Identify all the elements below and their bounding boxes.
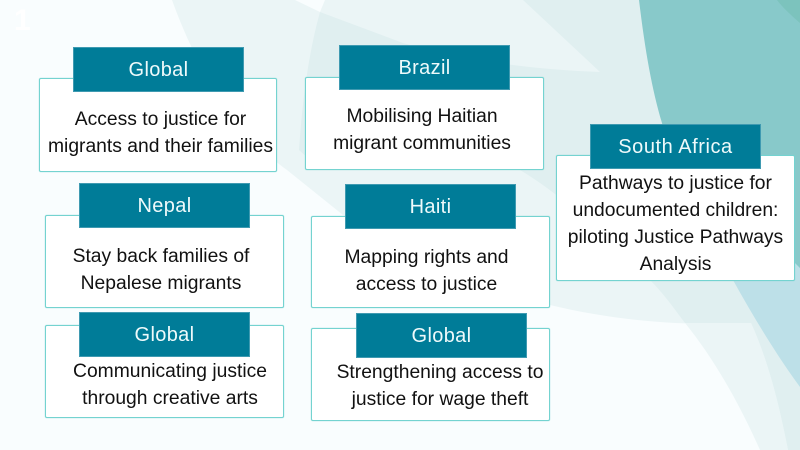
- heading: Nepal: [79, 183, 250, 228]
- heading: South Africa: South Africa: [618, 136, 733, 158]
- text: pathways to justice: Pathways to justice for: [579, 173, 772, 194]
- text: wage theft: [337, 362, 543, 410]
- card: Global creative arts: [44, 312, 284, 418]
- text: stay back families: Nepalese migrants: [81, 273, 241, 294]
- card: Haiti: [310, 184, 550, 308]
- text: wage theft: Strengthening access to: [337, 362, 543, 383]
- heading: Global: [79, 312, 250, 357]
- text: pathways to justice: Analysis: [640, 254, 711, 275]
- text: communicating justice: Communicating justice: [73, 361, 267, 382]
- heading: Nepal: Nepal: [137, 195, 192, 217]
- text: mapping rights: [344, 247, 508, 295]
- text: access to justice: Access to justice for: [75, 109, 246, 130]
- text: mapping rights: access to justice: [356, 274, 497, 295]
- text: pathways to justice: piloting Justice Pathways: [568, 227, 783, 248]
- card: Brazil: [304, 45, 544, 170]
- text: stay back families: Stay back families of: [73, 246, 249, 267]
- text: wage theft: justice for wage theft: [352, 389, 528, 410]
- heading: Global: Global: [135, 324, 194, 346]
- card: Global wage theft: [310, 313, 550, 422]
- text: access to justice: migrants and their families: [48, 136, 273, 157]
- text: mapping rights: Mapping rights and: [344, 247, 508, 268]
- text: mobilising Haitian: Mobilising Haitian: [346, 106, 498, 127]
- heading: Global: Global: [129, 59, 188, 81]
- text: pathways to justice: [568, 173, 783, 275]
- heading: Brazil: Brazil: [398, 57, 451, 79]
- corner mark: 1: [14, 4, 31, 37]
- card: Nepal: [44, 183, 284, 308]
- heading: Brazil: [339, 45, 510, 90]
- text: stay back families: [73, 246, 250, 294]
- text: communicating justice: [73, 361, 267, 409]
- text: mobilising Haitian: migrant communities: [333, 133, 511, 154]
- heading: Haiti: Haiti: [410, 196, 451, 218]
- heading: Global: [73, 47, 244, 92]
- heading: South Africa: [590, 124, 761, 169]
- heading: Global: Global: [412, 325, 471, 347]
- card: Global access to justice: [38, 47, 278, 172]
- text: access to justice: [48, 109, 273, 157]
- text: communicating justice: through creative arts: [82, 388, 258, 409]
- heading: Haiti: [345, 184, 516, 229]
- card: South Africa: [556, 124, 796, 282]
- text: mobilising Haitian: [333, 106, 511, 154]
- text: pathways to justice: undocumented children:: [573, 200, 778, 221]
- heading: Global: [356, 313, 527, 358]
